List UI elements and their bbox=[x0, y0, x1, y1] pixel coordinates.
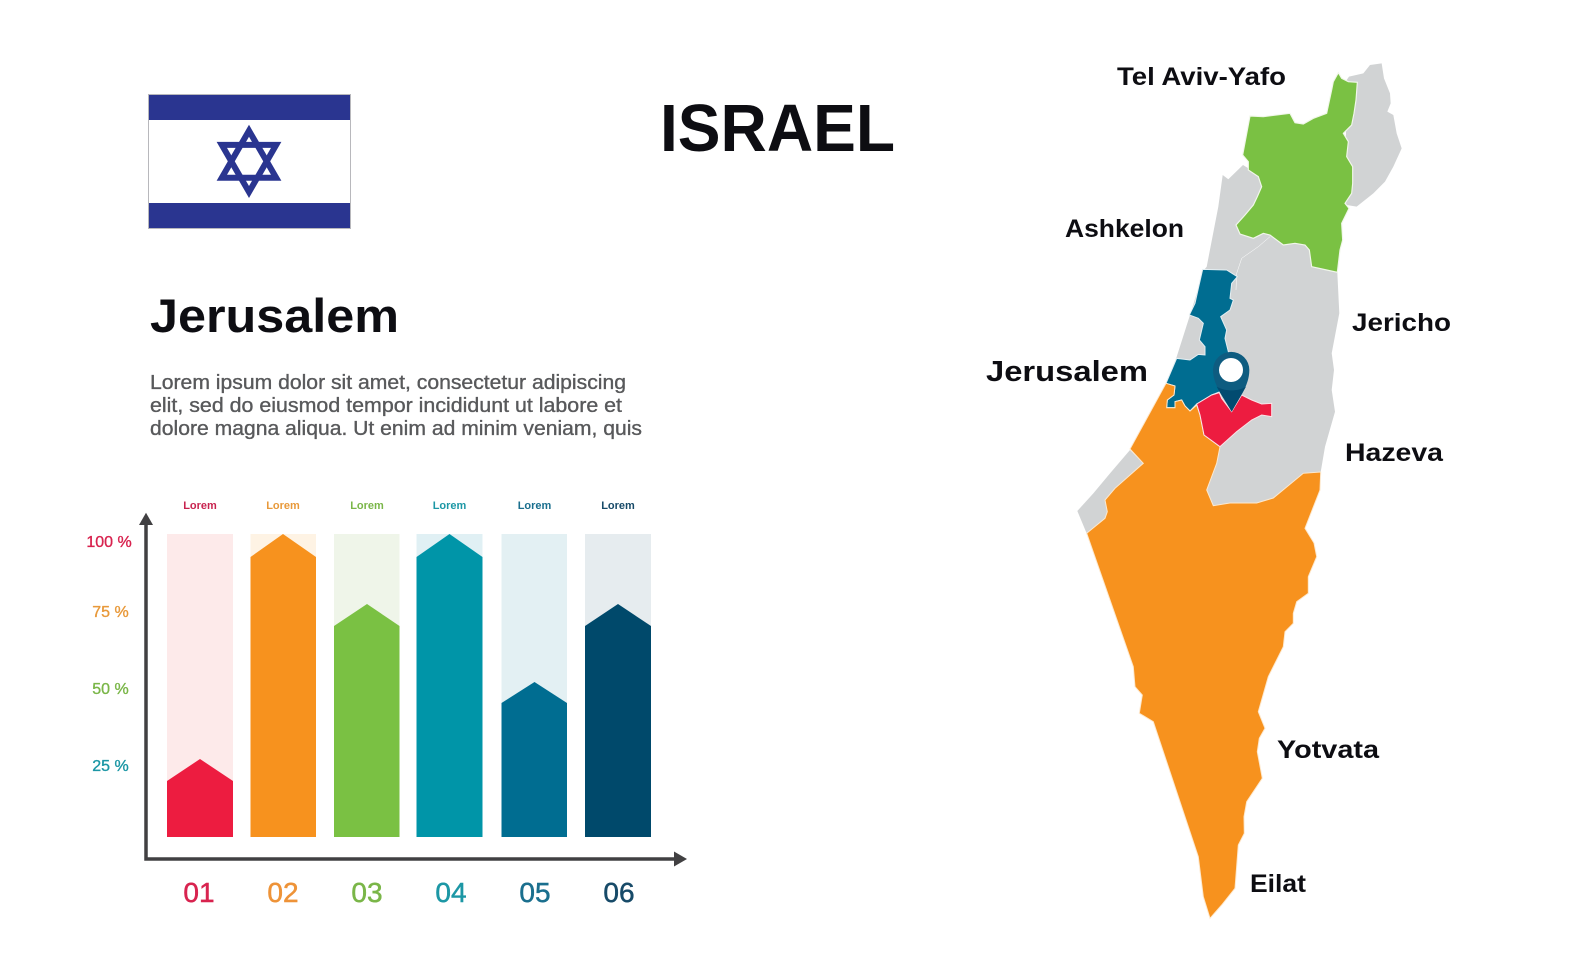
bar 02 bbox=[250, 534, 316, 837]
text block: description: elit, sed do eiusmod tempor incididunt ut labore et bbox=[150, 395, 622, 417]
bar 01 bbox=[167, 534, 233, 837]
bar 06 bbox=[585, 534, 651, 837]
boundary line bbox=[1236, 237, 1270, 290]
map label: Tel Aviv-Yafo: Tel Aviv-Yafo bbox=[1117, 63, 1286, 91]
region: Tel Aviv (blue) bbox=[1166, 269, 1237, 411]
category numbers: 01 bbox=[183, 877, 215, 908]
category numbers: 02 bbox=[267, 877, 299, 908]
text block: description: Lorem ipsum dolor sit amet, consectetur adipiscing bbox=[150, 372, 626, 394]
map label: Eilat: Eilat bbox=[1250, 870, 1307, 898]
y axis percentage labels: 50 % bbox=[92, 681, 129, 698]
column labels: Lorem bbox=[350, 500, 384, 512]
bar 05 bbox=[502, 534, 567, 837]
icon: location pin bbox=[1213, 352, 1249, 412]
y axis percentage labels: 100 % bbox=[86, 534, 132, 551]
heading: Jerusalem: Jerusalem bbox=[150, 289, 399, 342]
region: central (grey) bbox=[1166, 165, 1339, 520]
category numbers: 03 bbox=[351, 877, 383, 908]
bar chart bbox=[86, 500, 687, 908]
region: Golan (grey) bbox=[1343, 63, 1402, 207]
category numbers: 04 bbox=[435, 877, 467, 908]
map of Israel bbox=[1077, 63, 1402, 918]
y axis percentage labels: 75 % bbox=[92, 604, 129, 621]
arrow: axes bbox=[139, 513, 687, 866]
region: south (orange) bbox=[1087, 383, 1321, 918]
text block: description: dolore magna aliqua. Ut enim ad minim veniam, quis bbox=[150, 418, 642, 440]
title: ISRAEL bbox=[660, 91, 895, 166]
column labels: Lorem bbox=[183, 500, 217, 512]
column labels: Lorem bbox=[266, 500, 300, 512]
column labels bbox=[183, 500, 635, 512]
map label: Jericho: Jericho bbox=[1352, 309, 1451, 337]
column labels: Lorem bbox=[518, 500, 552, 512]
map label: Hazeva: Hazeva bbox=[1345, 439, 1444, 467]
map label: Jerusalem: Jerusalem bbox=[986, 356, 1148, 388]
category numbers: 06 bbox=[603, 877, 635, 908]
bar 03 bbox=[334, 534, 400, 837]
icon: flag of Israel bbox=[148, 94, 350, 228]
text block: description bbox=[150, 372, 642, 440]
column labels: Lorem bbox=[601, 500, 635, 512]
column labels: Lorem bbox=[433, 500, 467, 512]
category numbers: 05 bbox=[519, 877, 551, 908]
map label: Yotvata: Yotvata bbox=[1277, 736, 1380, 764]
y axis percentage labels bbox=[86, 534, 132, 775]
region: Jerusalem (red) bbox=[1197, 393, 1272, 447]
region: north (green) bbox=[1236, 73, 1357, 272]
y axis percentage labels: 25 % bbox=[92, 758, 129, 775]
map label: Ashkelon: Ashkelon bbox=[1065, 215, 1184, 243]
category numbers bbox=[183, 877, 635, 908]
bar 04 bbox=[416, 534, 482, 837]
region: Gaza (grey) bbox=[1077, 450, 1143, 533]
